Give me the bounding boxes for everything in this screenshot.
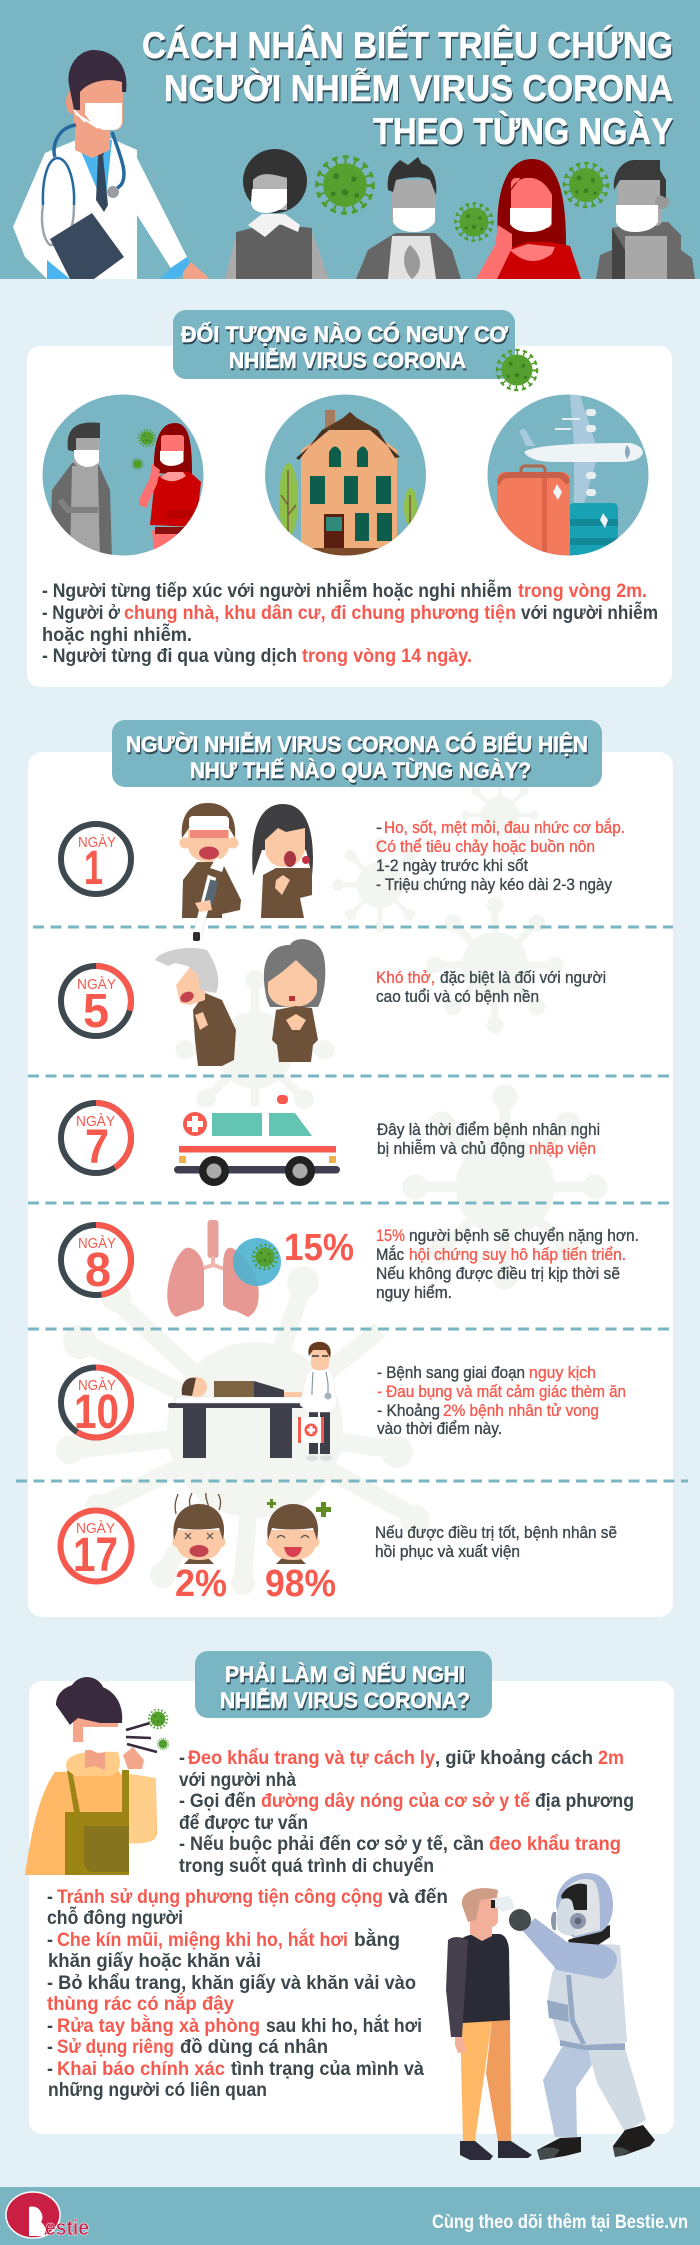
day 1 text — [376, 818, 625, 894]
text: prevention actions — [47, 1886, 448, 2101]
text: first actions: địa phương — [535, 1790, 634, 1812]
text: prevention actions: bằng — [354, 1927, 400, 1951]
day 17 badge: NGÀY — [76, 1520, 115, 1537]
day 10 text: - Đau bụng và mất cảm giác thèm ăn — [377, 1382, 626, 1401]
text: first actions: - Nếu buộc phải đến cơ sở y tế, cần — [179, 1833, 484, 1855]
day 8 badge: 8 — [85, 1244, 111, 1297]
day 1 text: Ho, sốt, mệt mỏi, đau nhức cơ bắp. — [384, 818, 625, 837]
text: prevention actions: Tránh sử dụng phương tiện công cộng — [57, 1886, 383, 1908]
heading: symptoms by day: NHƯ THẾ NÀO QUA TỪNG NGÀY? — [190, 758, 531, 783]
text: prevention actions: Khai báo chính xác — [57, 2058, 225, 2080]
woman in red — [476, 159, 581, 279]
day 5 text — [376, 968, 606, 1006]
text: risk groups: - Người từng đi qua vùng dịch — [42, 645, 297, 667]
heading: symptoms by day: NGƯỜI NHIỄM VIRUS CORONA CÓ BIỂU HIỆN — [126, 731, 588, 757]
footer bar — [0, 2187, 700, 2245]
heading: symptoms by day — [112, 720, 602, 787]
day 8 text: Nếu không được điều trị kịp thời sẽ — [376, 1264, 620, 1283]
text: prevention actions: Che kín mũi, miệng khi ho, hắt hơi — [57, 1927, 348, 1951]
icon: virus — [497, 350, 537, 390]
day 10 text: nguy kịch — [529, 1363, 596, 1382]
day 5 illustration: elderly couple — [155, 939, 325, 1066]
day 8 text: 15% — [376, 1226, 405, 1245]
day 7 text: bị nhiễm và chủ động — [377, 1139, 525, 1158]
day 17 text: hồi phục và xuất viện — [375, 1542, 520, 1561]
day 8 text: người bệnh sẽ chuyển nặng hơn. — [409, 1226, 639, 1245]
text: first actions: , giữ khoảng cách — [435, 1747, 593, 1769]
day 5 badge: NGÀY — [77, 976, 116, 993]
text: prevention actions: - — [47, 1929, 53, 1951]
logo: Bestie: estie — [45, 2215, 89, 2240]
day 5 badge: 5 — [83, 985, 109, 1038]
day 5 text: Khó thở, — [376, 968, 435, 987]
day 1 text: Có thể tiêu chảy hoặc buồn nôn — [376, 837, 595, 856]
day 7 badge — [61, 1103, 131, 1174]
day 8 text — [376, 1226, 639, 1302]
heading: what to do: NHIỄM VIRUS CORONA? — [220, 1687, 470, 1713]
text: risk groups: hoặc nghi nhiễm. — [42, 622, 192, 646]
text: risk groups: chung nhà, khu dân cư, đi chung phương tiện — [124, 602, 516, 624]
illustration: man having temperature checked — [446, 1888, 532, 2160]
day 5 badge — [61, 966, 131, 1038]
day 7 text: nhập viện — [529, 1139, 596, 1158]
logo: Bestie — [6, 2192, 89, 2240]
day 8 text: Mắc — [376, 1245, 404, 1264]
text: risk groups: - Người từng tiếp xúc với người nhiễm hoặc nghi nhiễm — [42, 578, 512, 602]
text: prevention actions: - — [47, 2015, 53, 2037]
text: first actions: đeo khẩu trang — [489, 1833, 621, 1855]
day 8 illustration: lungs with virus — [167, 1220, 281, 1317]
day 7 text — [377, 1120, 600, 1158]
heading: risk groups — [173, 310, 515, 379]
day 10 badge: NGÀY — [78, 1377, 116, 1394]
group of masked people — [225, 149, 695, 279]
day 1 badge: 1 — [84, 842, 103, 895]
day 17 text — [375, 1523, 617, 1561]
day 8 badge: NGÀY — [78, 1235, 116, 1252]
text: first actions — [179, 1747, 634, 1877]
day 1 illustration: man and woman with fever — [180, 803, 313, 941]
text: first actions: trong suốt quá trình di chuyển — [179, 1855, 434, 1877]
text: prevention actions: Sử dụng riêng — [57, 2036, 174, 2058]
day 10 text: - Bệnh sang giai đoạn — [377, 1363, 525, 1382]
text: first actions: - Gọi đến — [179, 1790, 256, 1812]
text: prevention actions: và đến — [388, 1886, 448, 1908]
day 1 text: - Triệu chứng này kéo dài 2-3 ngày — [376, 875, 612, 894]
virus particles — [317, 157, 608, 241]
icon: plane and luggage — [488, 394, 648, 563]
text: prevention actions: - Bỏ khẩu trang, khăn giấy và khăn vải vào — [47, 1972, 416, 1994]
heading: risk groups: ĐỐI TƯỢNG NÀO CÓ NGUY CƠ — [181, 321, 508, 347]
icon: house — [265, 394, 426, 558]
text: risk groups — [42, 578, 658, 667]
illustration: health worker in protective suit — [509, 1873, 655, 2160]
day 10 text: - Khoảng — [377, 1401, 440, 1420]
text: prevention actions: sau khi ho, hắt hơi — [266, 2013, 422, 2037]
man with hood — [596, 160, 695, 279]
text: prevention actions: chỗ đông người — [47, 1905, 183, 1929]
day 5 text: cao tuổi và có bệnh nền — [376, 987, 539, 1006]
day 7 badge: NGÀY — [76, 1113, 115, 1130]
day 10 text: 2% bệnh nhân tử vong — [443, 1401, 599, 1420]
day 17 badge — [60, 1510, 132, 1582]
day 10 badge: 10 — [74, 1386, 119, 1439]
panel: what to do — [25, 1651, 674, 2134]
header banner — [0, 0, 700, 279]
illustration: coughing woman — [25, 1677, 169, 1875]
day 17 text: Nếu được điều trị tốt, bệnh nhân sẽ — [375, 1523, 617, 1542]
text: first actions: - — [179, 1747, 185, 1769]
panel: symptoms by day — [16, 720, 688, 1617]
text: first actions: với người nhà — [179, 1769, 296, 1791]
day 7 illustration: ambulance — [174, 1095, 340, 1186]
day 8 badge — [61, 1225, 131, 1297]
stat: 2%: 2% — [175, 1563, 227, 1605]
background virus watermarks — [56, 776, 608, 1595]
text: risk groups: - Người ở — [42, 602, 120, 624]
text: prevention actions: đồ dùng cá nhân — [180, 2036, 328, 2058]
stat: 15%: 15% — [284, 1227, 354, 1269]
day 10 badge — [61, 1368, 131, 1439]
text: prevention actions: những người có liên quan — [48, 2079, 267, 2101]
day 1 badge — [61, 824, 131, 895]
text: prevention actions: - — [47, 1886, 53, 1908]
text: prevention actions: khăn giấy hoặc khăn vải — [48, 1950, 261, 1972]
text: prevention actions: thùng rác có nắp đậy — [47, 1991, 234, 2015]
day 7 badge: 7 — [85, 1121, 109, 1174]
text: risk groups: trong vòng 2m. — [518, 580, 647, 602]
woman in vest — [225, 149, 329, 279]
text: first actions: Đeo khẩu trang và tự cách ly — [188, 1747, 435, 1769]
day 1 badge: NGÀY — [78, 834, 116, 851]
icon: contact with infected people — [42, 394, 204, 560]
text: first actions: để được tư vấn — [179, 1812, 308, 1834]
day 7 text: Đây là thời điểm bệnh nhân nghi — [377, 1120, 600, 1139]
title — [142, 24, 673, 152]
text: risk groups: với người nhiễm — [521, 600, 658, 624]
text: prevention actions: - — [47, 2058, 53, 2080]
day 8 text: hội chứng suy hô hấp tiến triển. — [409, 1245, 626, 1264]
text: prevention actions: Rửa tay bằng xà phòng — [57, 2013, 260, 2037]
text: first actions: đường dây nóng của cơ sở y tế — [261, 1790, 530, 1812]
day 5 text: đặc biệt là đối với người — [440, 968, 606, 987]
text: prevention actions: - — [47, 2036, 53, 2058]
heading: what to do — [195, 1651, 492, 1718]
stat: 98%: 98% — [265, 1563, 336, 1605]
doctor illustration — [13, 50, 209, 279]
day 10 illustration: patient and doctor — [168, 1342, 337, 1461]
text: risk groups: trong vòng 14 ngày. — [302, 645, 472, 667]
panel: risk groups — [27, 310, 672, 687]
day 17 illustration: faces — [172, 1493, 331, 1564]
text: prevention actions: tình trạng của mình và — [231, 2058, 424, 2080]
text: first actions: 2m — [598, 1747, 624, 1769]
day 17 badge: 17 — [73, 1529, 118, 1582]
day 8 text: nguy hiểm. — [376, 1283, 452, 1302]
day 10 text — [377, 1363, 626, 1438]
day 10 text: vào thời điểm này. — [377, 1419, 502, 1438]
man in jacket — [356, 157, 461, 279]
heading: what to do: PHẢI LÀM GÌ NẾU NGHI — [225, 1662, 465, 1687]
day 1 text: - — [376, 818, 382, 837]
day 1 text: 1-2 ngày trước khi sốt — [376, 856, 528, 875]
heading: risk groups: NHIỄM VIRUS CORONA — [229, 347, 466, 373]
